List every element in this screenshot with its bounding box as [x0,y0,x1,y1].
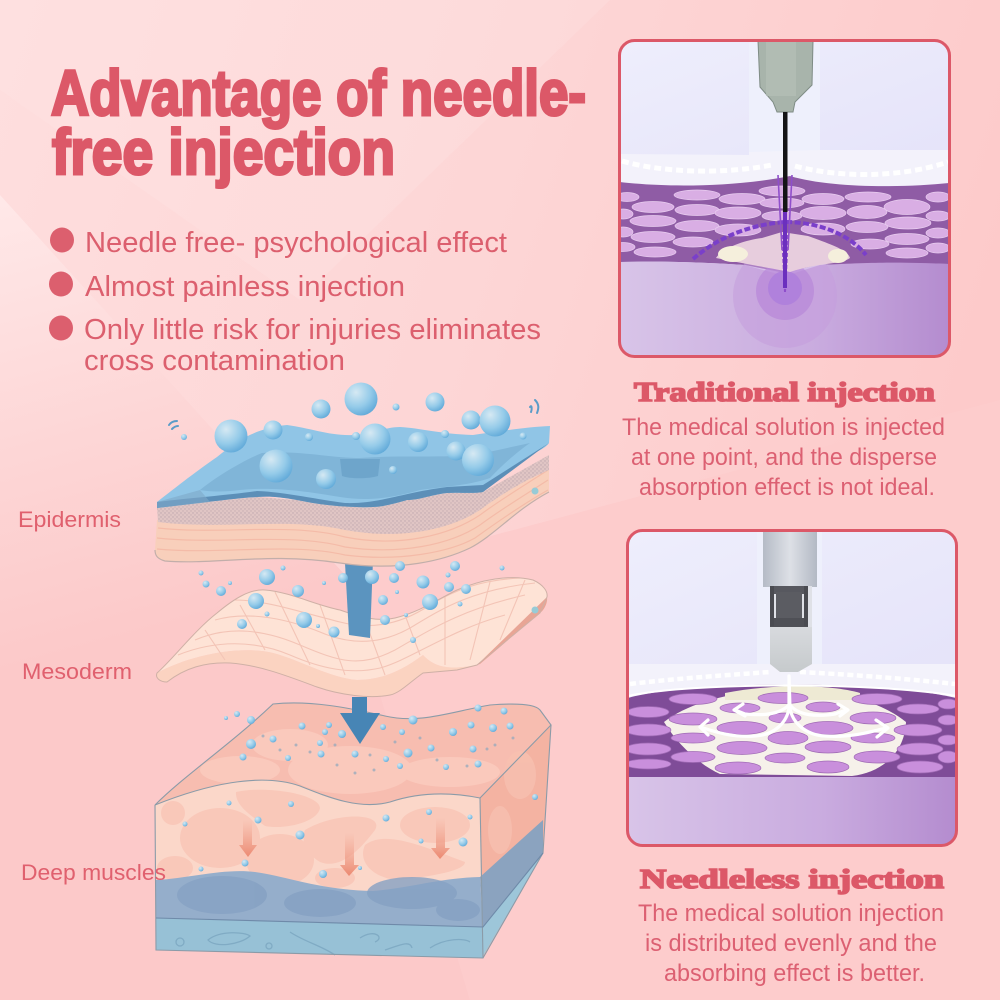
skin surface band [621,150,948,186]
illustration: epidermis layers [155,425,550,614]
tissue band [620,176,949,273]
bullet: needle free: Needle free- psychological effect [85,227,507,259]
skin dashes [622,161,948,175]
blue top layer [157,425,550,508]
skin layer labels [18,507,166,885]
bullet: little risk: cross contamination [84,345,345,377]
deep layer [620,262,949,357]
arrow: through layers [345,560,373,638]
arrow: into block [340,697,380,744]
text: needleless description: is distributed evenly and the [645,930,937,957]
text: traditional description: The medical solution is injected [622,414,945,441]
block right face [480,725,551,958]
injector barrel [763,531,817,587]
orange downward arrows [239,818,450,876]
blue layers right [480,820,543,927]
text: traditional description: at one point, and the disperse [631,444,937,471]
block front face [155,780,483,958]
text: needleless description: absorbing effect is better. [664,960,925,987]
bullet: painless: Almost painless injection [85,271,405,303]
purple dashed spread [693,222,866,259]
needle [783,112,788,212]
heading: traditional injection: Traditional injection [634,377,935,407]
bullet: little risk: Only little risk for injuries eliminates [84,314,541,346]
side speck [532,488,538,494]
title [51,57,586,188]
grainy layer [157,455,549,534]
deep layer [628,777,956,845]
syringe hub [758,41,813,112]
illustration: mesoderm sheet [157,578,547,697]
illustration: deep muscle block [155,703,551,958]
text: needleless description: The medical solution injection [638,900,944,927]
absorbed droplets [182,704,538,878]
splash marks [169,400,538,429]
block top surface [155,703,551,805]
diffusion rings [733,264,826,348]
bullet list [49,227,541,377]
blue fat layer front [156,871,483,927]
text: traditional description [622,414,945,501]
title: Advantage of needle- [51,57,586,129]
injected channel [778,175,792,250]
sheet surface [157,578,547,680]
blue base layer front [156,918,483,958]
bullet: little risk [49,314,541,377]
cells [625,692,958,774]
nozzle [770,586,808,627]
water bubbles [181,382,526,643]
tissue band [628,684,956,777]
injector tip [770,627,812,672]
panel window lines [749,104,820,152]
sheet front edge [157,650,477,697]
label: mesoderm: Mesoderm [22,659,132,684]
panel: traditional injection [611,40,950,357]
panel: needleless injection [625,530,958,846]
cavity [716,232,850,272]
skin dashes [630,672,955,684]
label: epidermis: Epidermis [18,507,121,532]
cells [611,186,950,258]
solution web [664,688,906,776]
heading: needleless injection: Needleless injection [640,864,944,894]
dispersal arrows [700,676,888,737]
text: needleless description [638,900,944,987]
label: deep muscles: Deep muscles [21,860,166,885]
title: free injection [52,116,395,188]
text: traditional description: absorption effect is not ideal. [639,474,935,501]
peach dermis layer [155,455,549,566]
